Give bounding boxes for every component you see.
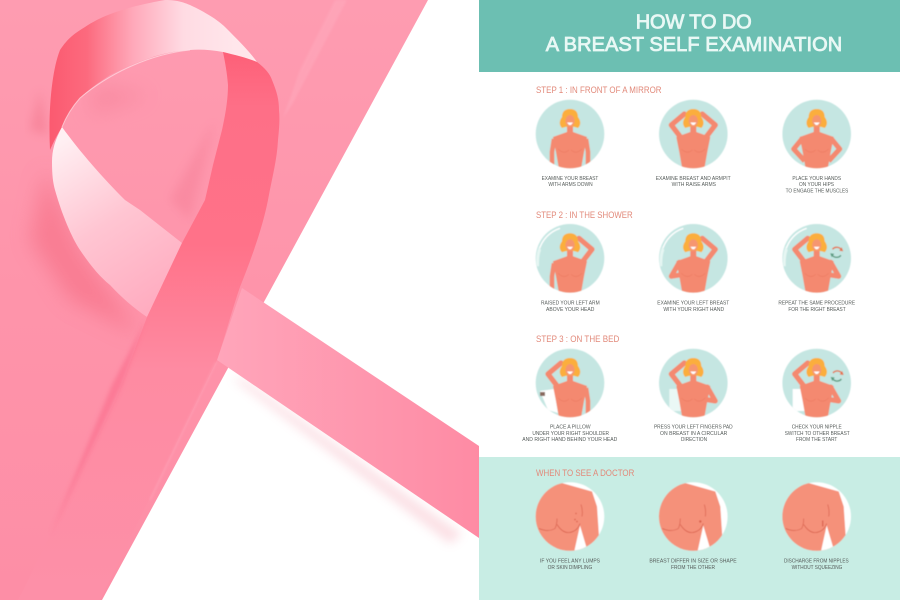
caption: step 1: PLACE YOUR HANDS bbox=[792, 176, 841, 182]
panel: when to see a doctor background bbox=[479, 457, 900, 600]
figure: nipple discharge bbox=[781, 480, 851, 552]
caption: step 2: REPEAT THE SAME PROCEDURE bbox=[778, 301, 855, 307]
figure: lumps or dimpling bbox=[534, 480, 604, 552]
caption: when to see a doctor: WITHOUT SQUEEZING bbox=[792, 565, 842, 571]
caption: when to see a doctor: OR SKIN DIMPLING bbox=[548, 565, 592, 571]
heading: step 1: STEP 1 : IN FRONT OF A MIRROR bbox=[536, 85, 662, 95]
figure: repeat for right breast bbox=[782, 224, 851, 293]
caption: when to see a doctor: FROM THE OTHER bbox=[671, 565, 715, 571]
figure: breast differs in size bbox=[657, 480, 728, 552]
caption: step 1: WITH RAISE ARMS bbox=[672, 182, 716, 188]
header band bbox=[479, 0, 900, 72]
caption: step 1 bbox=[542, 176, 849, 195]
figure: finger pads on breast bbox=[659, 349, 728, 418]
top loop bbox=[49, 0, 257, 150]
caption: step 2 bbox=[541, 301, 855, 313]
figure: pillow under shoulder bbox=[536, 349, 604, 418]
figure: examine left breast bbox=[659, 224, 728, 293]
pink background band bbox=[0, 0, 428, 600]
caption: step 3: CHECK YOUR NIPPLE bbox=[792, 425, 842, 431]
caption: step 3: PLACE A PILLOW bbox=[550, 425, 591, 431]
caption: when to see a doctor: IF YOU FEEL ANY LUMPS bbox=[540, 559, 600, 565]
tail shadow bbox=[232, 378, 462, 544]
ribbon illustration bbox=[0, 0, 479, 600]
caption: step 2: FOR THE RIGHT BREAST bbox=[788, 307, 846, 313]
ribbon lower tail bbox=[217, 288, 479, 538]
figure: raised arms bbox=[659, 100, 728, 169]
heading: step 2: STEP 2 : IN THE SHOWER bbox=[536, 210, 633, 220]
lower loop bbox=[52, 127, 182, 317]
caption: step 3: DIRECTION bbox=[681, 437, 707, 443]
heading: step 3: STEP 3 : ON THE BED bbox=[536, 334, 620, 344]
figure: raised left arm bbox=[536, 224, 604, 293]
caption: step 1: EXAMINE YOUR BREAST bbox=[542, 176, 599, 182]
caption: step 1: EXAMINE BREAST AND ARMPIT bbox=[656, 176, 731, 182]
caption: step 1: ON YOUR HIPS bbox=[799, 182, 834, 188]
caption: step 2: ABOVE YOUR HEAD bbox=[546, 307, 594, 313]
caption: step 3: ON BREAST IN A CIRCULAR bbox=[660, 431, 727, 437]
caption: step 3: FROM THE START bbox=[796, 437, 838, 443]
caption: when to see a doctor: BREAST DIFFER IN SIZE OR SHAPE bbox=[649, 559, 737, 565]
caption: step 2: RAISED YOUR LEFT ARM bbox=[541, 301, 600, 307]
caption: step 3: SWITCH TO OTHER BREAST bbox=[785, 431, 850, 437]
figure: check nipple bbox=[782, 349, 851, 418]
caption: when to see a doctor bbox=[540, 559, 849, 571]
caption: step 3 bbox=[522, 425, 850, 443]
figure: arms down bbox=[536, 100, 604, 169]
title: HOW TO DO bbox=[636, 12, 752, 34]
caption: step 3: PRESS YOUR LEFT FINGERS PAD bbox=[654, 425, 733, 431]
heading: when to see a doctor: WHEN TO SEE A DOCTOR bbox=[536, 468, 635, 478]
caption: step 3: AND RIGHT HAND BEHIND YOUR HEAD bbox=[522, 437, 617, 443]
caption: step 1: TO ENGAGE THE MUSCLES bbox=[786, 189, 849, 195]
caption: step 1: WITH ARMS DOWN bbox=[548, 182, 593, 188]
caption: step 2: WITH YOUR RIGHT HAND bbox=[663, 307, 724, 313]
title: A BREAST SELF EXAMINATION bbox=[546, 34, 842, 56]
title bbox=[546, 12, 842, 56]
caption: when to see a doctor: DISCHARGE FROM NIPPLES bbox=[784, 559, 849, 565]
caption: step 2: EXAMINE YOUR LEFT BREAST bbox=[657, 301, 730, 307]
main strap bbox=[132, 52, 280, 368]
caption: step 3: UNDER YOUR RIGHT SHOULDER bbox=[532, 431, 609, 437]
figure: hands on hips bbox=[782, 100, 851, 169]
